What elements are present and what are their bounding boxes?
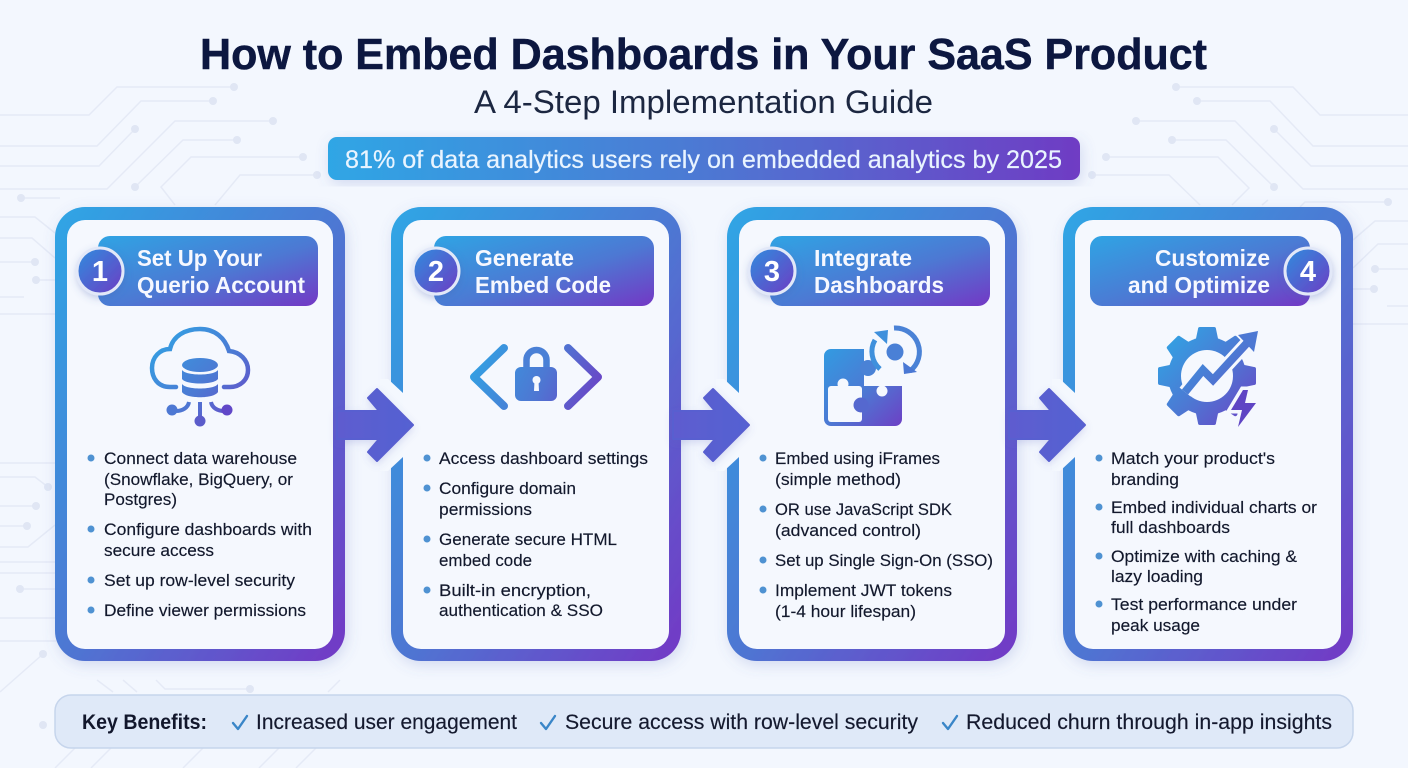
benefit: churn: Reduced churn through in-app insights: [966, 711, 1332, 734]
step 3 header: [749, 236, 990, 306]
step 4 bullet list: Match your product's: [1111, 449, 1275, 468]
subtitle: A 4-Step Implementation Guide: [474, 84, 933, 120]
panel: step 2: [391, 207, 681, 661]
step 1 header: Querio Account: [137, 272, 305, 298]
step 2 header: 2: [428, 256, 444, 288]
panel: step 4: [1063, 207, 1353, 661]
step 3 bullet list: (1-4 hour lifespan): [775, 602, 916, 621]
step 1 bullet list: Postgres): [104, 490, 177, 509]
step 2 bullet list: Access dashboard settings: [439, 449, 648, 468]
step 1 bullet list: Set up row-level security: [104, 571, 296, 590]
step 2 bullet list: authentication & SSO: [439, 601, 603, 620]
step 3 bullet list: Implement JWT tokens: [775, 581, 952, 600]
step 4 bullet list: [1096, 449, 1317, 635]
step 2 bullet list: [424, 449, 648, 620]
step 3 bullet list: (advanced control): [775, 521, 921, 540]
icon: cloud database: [152, 329, 248, 426]
step 3 bullet list: Embed using iFrames: [775, 449, 940, 468]
panel: step 1: [55, 207, 345, 661]
key benefits bar: Key Benefits:: [82, 711, 207, 734]
step 3 header: Integrate: [814, 245, 912, 271]
step 3 bullet list: OR use JavaScript SDK: [775, 500, 953, 519]
step 1 bullet list: (Snowflake, BigQuery, or: [104, 470, 293, 489]
step 3 bullet list: Set up Single Sign-On (SSO): [775, 551, 993, 570]
step 1 bullet list: Define viewer permissions: [104, 601, 306, 620]
step 2 bullet list: Configure domain: [439, 479, 576, 498]
step 1 bullet list: [88, 449, 312, 620]
benefit: security: Secure access with row-level security: [565, 711, 919, 734]
statistic banner: 81% of data analytics users rely on embedded analytics by 2025: [345, 146, 1062, 174]
step 4 bullet list: Test performance under: [1111, 595, 1297, 614]
step 4 header: Customize: [1155, 245, 1270, 271]
step 1 bullet list: Connect data warehouse: [104, 449, 297, 468]
icon: gear with growth arrow and bolt: [1158, 327, 1258, 427]
step 4 header: [1090, 236, 1331, 306]
step 1 header: [77, 236, 318, 306]
step 2 bullet list: permissions: [439, 500, 532, 519]
step 2 header: Generate: [475, 245, 574, 271]
title: How to Embed Dashboards in Your SaaS Product: [200, 30, 1207, 79]
step 1 bullet list: Configure dashboards with: [104, 520, 312, 539]
icon: puzzle with sync arrows: [824, 328, 919, 426]
step 1 header: Set Up Your: [137, 245, 262, 271]
step 4 header: 4: [1300, 256, 1316, 288]
arrow: step 2 to step 3: [673, 379, 749, 471]
step 3 bullet list: [760, 449, 993, 621]
arrow: step 1 to step 2: [337, 379, 413, 471]
statistic banner: [328, 137, 1080, 180]
step 2 header: [413, 236, 654, 306]
step 1 header: 1: [92, 256, 108, 288]
step 1 bullet list: secure access: [104, 541, 214, 560]
step 2 bullet list: embed code: [439, 551, 532, 570]
step 3 bullet list: (simple method): [775, 470, 901, 489]
step 3 header: 3: [764, 256, 780, 288]
step 4 bullet list: full dashboards: [1111, 518, 1230, 537]
step 2 bullet list: Built-in encryption,: [439, 581, 591, 600]
key benefits bar: [55, 695, 1353, 748]
step 4 header: and Optimize: [1128, 272, 1270, 298]
arrow: step 3 to step 4: [1009, 379, 1085, 471]
benefit: engagement: Increased user engagement: [256, 711, 517, 734]
icon: code brackets with lock: [474, 348, 598, 406]
step 3 header: Dashboards: [814, 272, 944, 298]
panel: step 3: [727, 207, 1017, 661]
step 2 header: Embed Code: [475, 272, 611, 298]
step 4 bullet list: peak usage: [1111, 616, 1200, 635]
step 4 bullet list: Embed individual charts or: [1111, 498, 1317, 517]
step 4 bullet list: lazy loading: [1111, 567, 1203, 586]
step 4 bullet list: Optimize with caching &: [1111, 547, 1298, 566]
step 4 bullet list: branding: [1111, 470, 1179, 489]
step 2 bullet list: Generate secure HTML: [439, 530, 617, 549]
